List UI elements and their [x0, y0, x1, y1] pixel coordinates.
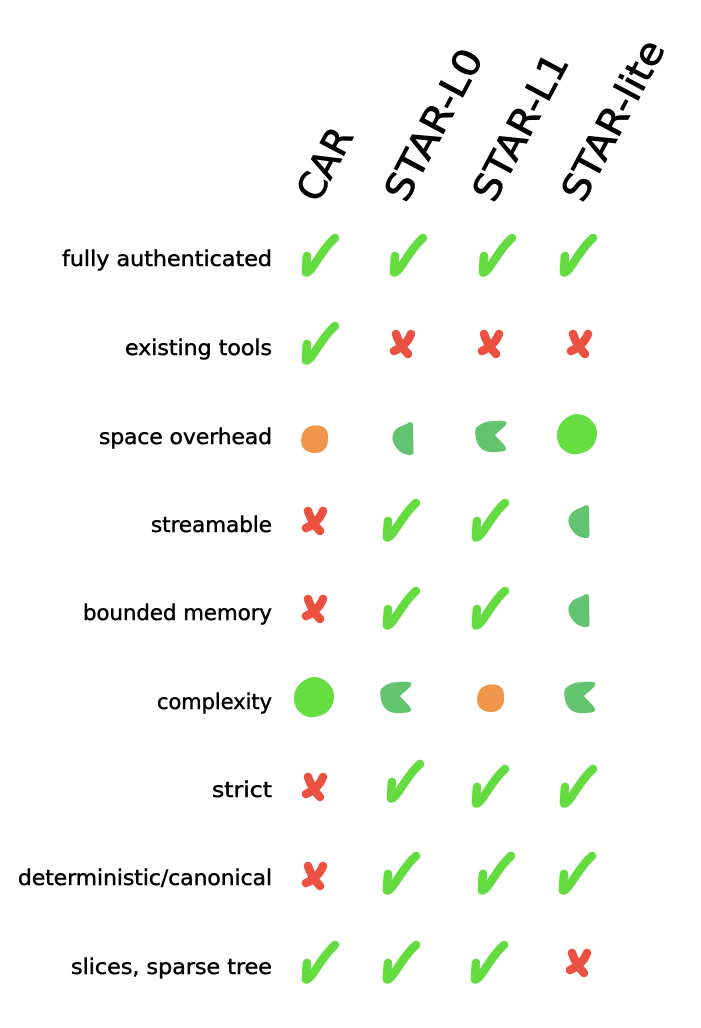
- icon: check STAR-L0: [387, 945, 416, 980]
- icon: check CAR: [306, 326, 335, 360]
- row: slices, sparse tree: [306, 945, 587, 980]
- icon: check STAR-L0: [394, 238, 423, 272]
- row: space overhead: [301, 414, 597, 455]
- icon: check STAR-L1: [482, 856, 511, 890]
- icon: quarter green STAR-lite: [568, 594, 590, 627]
- icon: check CAR: [306, 945, 335, 980]
- header: CAR: CAR: [288, 120, 362, 208]
- icon: check STAR-lite: [563, 856, 592, 890]
- header: STAR-L0: STAR-L0: [376, 41, 492, 208]
- icon: check STAR-L0: [391, 764, 420, 798]
- icon: quarter green STAR-lite: [568, 505, 590, 538]
- row: streamable: [306, 503, 590, 538]
- icon: three-quarter green STAR-L1: [475, 421, 506, 452]
- row: existing tools: [306, 326, 588, 360]
- icon: cross STAR-lite: [571, 334, 588, 354]
- icon: check STAR-L1: [476, 769, 505, 804]
- icon: cross STAR-L1: [482, 334, 499, 354]
- label: existing tools: existing tools: [125, 336, 272, 360]
- row: complexity: [294, 677, 595, 717]
- icon: cross CAR: [306, 777, 323, 797]
- icon: check STAR-L1: [483, 238, 512, 272]
- header: STAR-lite: STAR-lite: [553, 33, 674, 208]
- label: fully authenticated: fully authenticated: [62, 247, 272, 271]
- icon: small orange circle CAR: [301, 425, 328, 453]
- icon: check STAR-lite: [564, 238, 593, 272]
- label: slices, sparse tree: slices, sparse tree: [71, 955, 272, 979]
- header: STAR-L1: STAR-L1: [464, 46, 578, 208]
- icon: full green circle STAR-lite: [557, 414, 597, 454]
- label: deterministic/canonical: deterministic/canonical: [18, 866, 272, 890]
- icon: quarter green STAR-L0: [392, 422, 414, 455]
- row labels: [18, 247, 272, 979]
- icon: cross CAR: [306, 511, 323, 531]
- icon: cross CAR: [306, 599, 323, 619]
- icon: cross STAR-L0: [394, 334, 411, 354]
- icon: cross STAR-lite: [570, 953, 587, 973]
- label: streamable: streamable: [151, 513, 272, 537]
- icon: full green circle CAR: [294, 677, 334, 717]
- icon: check CAR: [306, 238, 335, 272]
- icon: three-quarter green STAR-L0: [380, 682, 411, 713]
- icon: small orange circle STAR-L1: [477, 684, 504, 712]
- icon: check STAR-L0: [387, 591, 416, 626]
- icon: check STAR-L1: [475, 945, 504, 980]
- icon: check STAR-L1: [476, 503, 505, 538]
- icon: cross CAR: [306, 866, 323, 886]
- row: deterministic/canonical: [306, 856, 592, 890]
- icon: check STAR-lite: [564, 769, 593, 804]
- label: space overhead: space overhead: [99, 425, 272, 449]
- icon: check STAR-L1: [476, 591, 505, 626]
- label: strict: strict: [212, 778, 272, 802]
- column headers: [288, 33, 674, 208]
- row: fully authenticated: [306, 238, 593, 272]
- icon: three-quarter green STAR-lite: [564, 682, 595, 713]
- row: strict: [306, 764, 593, 804]
- icon: check STAR-L0: [387, 503, 416, 538]
- label: bounded memory: bounded memory: [83, 601, 272, 625]
- row: bounded memory: [306, 591, 590, 627]
- icon: check STAR-L0: [387, 856, 416, 890]
- label: complexity: complexity: [157, 690, 272, 714]
